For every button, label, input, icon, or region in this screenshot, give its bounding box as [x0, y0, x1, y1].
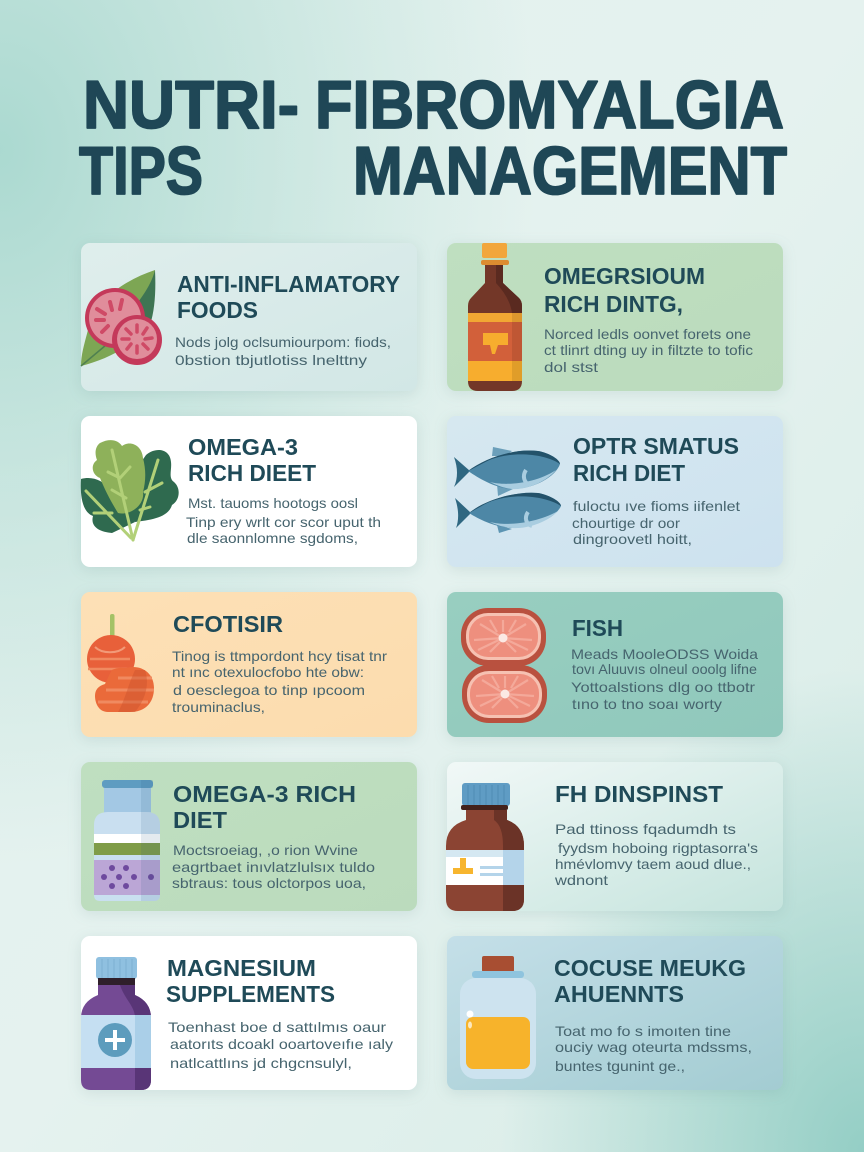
body text: natlcattlıns jd chgcnsulyl,	[170, 1055, 352, 1071]
body text: hmévlomvy taem aoud dlue.,	[555, 856, 751, 872]
panel: cocuse meukg ahuennts	[447, 936, 783, 1090]
body text: dol stst	[544, 359, 598, 375]
body text: buntes tgunint ge.,	[555, 1058, 685, 1074]
body text	[172, 648, 387, 715]
heading: OMEGA-3 RICH	[173, 781, 356, 807]
panel: anti-inflammatory foods	[81, 243, 417, 391]
heading: OMEGA-3	[188, 434, 298, 460]
title: FIBROMYALGIA	[315, 67, 784, 143]
body text	[571, 646, 758, 712]
body text: Toenhast boe d sattılmıs oaur	[168, 1019, 386, 1035]
body text	[572, 498, 740, 547]
body text: Tinog is ttmpordont hcy tisat tnr	[172, 648, 387, 664]
panel: cfotisir	[81, 592, 417, 737]
body text: 0bstion tbjutlotiss lnelttny	[175, 352, 367, 368]
body text: dingroovetl hoitt,	[573, 531, 692, 547]
heading	[188, 434, 316, 486]
heading: MAGNESIUM	[167, 955, 316, 981]
icon: tomatoes	[87, 614, 154, 712]
body text: dle saonnlomne sgdoms,	[187, 530, 358, 546]
heading	[544, 263, 705, 317]
heading: RICH DIEET	[188, 460, 316, 486]
body text: Tinp ery wrlt cor scor uput th	[186, 514, 381, 530]
body text: Yottoalstions dlg oo ttbotr	[571, 679, 755, 695]
body text: Pad ttinoss fqadumdh ts	[555, 821, 736, 837]
heading	[173, 781, 356, 833]
heading: FH DINSPINST	[555, 781, 723, 807]
heading: RICH DINTG,	[544, 291, 683, 317]
heading	[177, 271, 400, 323]
icon: pale supplement bottle	[94, 780, 160, 901]
heading: RICH DIET	[573, 460, 685, 486]
icon: two fish	[454, 447, 561, 533]
panel: fh dinspinst	[446, 762, 783, 911]
heading: AHUENNTS	[554, 981, 684, 1007]
icon: leafy greens	[81, 440, 179, 540]
body text: ouciy wag oteurta mdssms,	[555, 1039, 752, 1055]
heading: ANTI-INFLAMATORY	[177, 271, 400, 297]
body text: Mst. tauoms hootogs oosl	[188, 495, 358, 511]
body text	[168, 1019, 393, 1071]
heading: OMEGRSIOUM	[544, 263, 705, 289]
heading: DIET	[173, 807, 227, 833]
body text: Nods jolg oclsumiourpom: fiods,	[175, 334, 391, 350]
body text: eagrtbaet inıvlatzlulsıx tuldo	[172, 859, 375, 875]
icon: jar with amber liquid	[460, 956, 536, 1079]
title	[79, 67, 787, 209]
body text: Toat mo fo s imoıten tine	[555, 1023, 731, 1039]
heading: SUPPLEMENTS	[166, 981, 335, 1007]
body text: ct tlinrt dting uy in filtzte to tofic	[544, 342, 753, 358]
heading: CFOTISIR	[173, 611, 283, 637]
body text: Norced ledls oonvet forets one	[544, 326, 751, 342]
body text: sbtraus: tous olctorpos uoa,	[172, 875, 366, 891]
icon: leaf and sliced fruit	[81, 270, 162, 366]
icon: two steaks	[461, 608, 547, 723]
body text: Moctsroeiag, ,o rion Wvine	[173, 842, 358, 858]
body text	[544, 326, 753, 375]
body text: Meads MooleODSS Woida	[571, 646, 758, 662]
heading	[166, 955, 335, 1007]
body text	[555, 1023, 752, 1074]
title: NUTRI-	[83, 67, 299, 143]
panel: omegrsioum rich dintg	[447, 243, 783, 391]
heading: OPTR SMATUS	[573, 433, 739, 459]
body text	[175, 334, 391, 368]
body text: chourtige dr oor	[572, 515, 680, 531]
panel: fish	[447, 592, 783, 737]
body text: tovı Aluuvıs olneul ooolg lifne	[572, 661, 757, 677]
title: MANAGEMENT	[353, 133, 787, 209]
body text	[186, 495, 381, 546]
icon: purple supplement bottle	[81, 957, 151, 1090]
body text: fuloctu ıve fioms iifenlet	[573, 498, 740, 514]
body text: trouminaclus,	[172, 699, 265, 715]
heading	[554, 955, 746, 1007]
body text: fyydsm hoboing rigptasorra's	[558, 840, 758, 856]
heading: FOODS	[177, 297, 258, 323]
body text: d oesclegoa to tinp ıpcoom	[173, 682, 365, 698]
body text: tıno to tno soaı worty	[572, 696, 722, 712]
body text	[172, 842, 375, 891]
heading: FISH	[572, 615, 623, 641]
title: TIPS	[79, 133, 203, 209]
body text	[554, 821, 758, 888]
icon: brown medicine bottle	[446, 783, 524, 911]
panel: omega-3 rich diet	[81, 762, 417, 911]
heading: COCUSE MEUKG	[554, 955, 746, 981]
icon: brown sauce bottle	[468, 243, 522, 391]
panel: omega-3 rich dieet	[81, 416, 417, 567]
body text: wdnont	[554, 872, 608, 888]
body text: aatorıts dcoakl ooartoveıfıe ıaly	[170, 1036, 393, 1052]
panel: magnesium supplements	[81, 936, 417, 1090]
heading	[573, 433, 739, 486]
panel: optr smatus rich diet	[447, 416, 783, 567]
body text: nt ınc otexulocfobo hte obw:	[172, 664, 364, 680]
